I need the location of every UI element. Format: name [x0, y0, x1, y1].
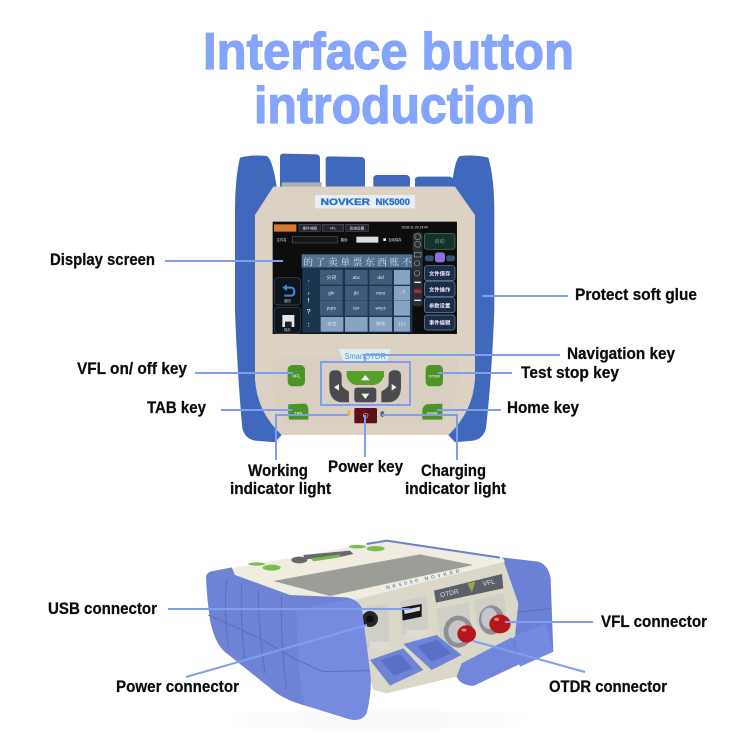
device: front view: 保存: [284, 327, 291, 332]
label: display screen: Display screen: [50, 250, 155, 269]
device: front view: NK5000: [376, 197, 410, 207]
device: front view: ,: [308, 288, 310, 295]
label: charging indicator light: Charging: [421, 461, 486, 480]
label: VFL connector: VFL connector: [601, 612, 707, 631]
device: front view: 分词: [327, 274, 336, 281]
TAB key: [288, 404, 308, 420]
device: front view: ?: [307, 308, 311, 315]
VFL key: [288, 365, 305, 386]
right menu buttons: [424, 233, 455, 249]
device: front view: 自动保存: [388, 237, 402, 242]
logo plate: [315, 195, 415, 208]
device: front view: 2018-11-29 14:44: [402, 225, 428, 229]
label: working indicator light: [230, 461, 331, 498]
device: front view: def: [377, 275, 385, 280]
device: front view: 符号: [376, 321, 386, 328]
HOME key: [422, 404, 442, 420]
title: [203, 23, 574, 135]
charging light: [380, 411, 384, 417]
top casing: [232, 541, 505, 599]
device: front view: 返回: [284, 298, 291, 303]
device: front view: ghi: [328, 291, 334, 296]
power key: [354, 408, 377, 423]
label: working indicator light: Working: [248, 461, 308, 480]
device: front view: abc: [353, 275, 361, 280]
left bumper: [235, 155, 282, 442]
device: front view: 事件编辑: [429, 319, 451, 327]
device: front view: 123: [398, 322, 406, 327]
navigation keys: [329, 370, 401, 402]
device: rear view: NK5000 NOVKER: [386, 568, 461, 591]
device: front view: 中文: [327, 321, 337, 328]
device: front view: :: [308, 322, 310, 329]
device: front view: pqrs: [327, 306, 337, 311]
USB port: [399, 595, 429, 635]
port label strip: VFL: [482, 579, 496, 588]
label: protect soft glue: Protect soft glue: [575, 285, 697, 304]
TAB key: TAB: [294, 410, 302, 415]
label: OTDR connector: OTDR connector: [549, 677, 667, 696]
right front bumper: [457, 637, 520, 686]
rubber port covers: [370, 630, 427, 650]
port label strip: OTDR: [440, 588, 460, 599]
right bumper: [502, 557, 553, 667]
VFL connector port: [474, 593, 511, 635]
port label strip: [434, 574, 503, 603]
label: TAB key: TAB key: [147, 398, 206, 417]
screen: [273, 222, 457, 334]
device: front view: 的了卖单票东西账不: [303, 254, 412, 268]
label: charging indicator light: [405, 461, 506, 498]
device: front view: 文件名: [277, 237, 287, 242]
nav key outline: [321, 362, 410, 405]
device: front view: 文件操作: [429, 285, 451, 293]
device: front view: [235, 154, 494, 442]
top keys: [248, 545, 385, 571]
label: home key: Home key: [507, 398, 579, 417]
device: front view: !: [308, 297, 310, 304]
rear panel: [350, 560, 518, 693]
leader lines: [165, 261, 593, 677]
title: introduction: [254, 77, 535, 135]
device: front view: mno: [376, 291, 386, 296]
device: front view: SmartOTDR: [344, 352, 386, 361]
VFL key: VFL: [292, 374, 301, 379]
label: power key: Power key: [328, 457, 403, 476]
device: front view: 参数设置: [429, 301, 451, 309]
OTDR key: OTDR: [429, 374, 440, 379]
OTDR connector port: [436, 601, 476, 648]
device: front view: wxyz: [375, 306, 386, 311]
device: front view: 路径:: [341, 237, 348, 242]
label: working indicator light: indicator light: [230, 479, 331, 498]
power port: [362, 603, 389, 648]
label: test stop key: Test stop key: [521, 363, 619, 382]
device: rear view: [206, 541, 553, 727]
device: front view: jkl: [353, 291, 359, 296]
right tool column: [413, 232, 423, 306]
candidate bar: [302, 254, 412, 268]
device: front view: .,?!: [399, 290, 405, 295]
device: front view: NOVKER: [321, 197, 370, 207]
device: front view: tuv: [353, 306, 360, 311]
device: front view: 文件保存: [429, 269, 451, 277]
device: front view: 事件地图: [302, 225, 317, 230]
back and save buttons: [274, 278, 300, 305]
device: front view: 启动: [435, 238, 445, 245]
top connectors: [280, 154, 453, 187]
left bumper: [206, 567, 371, 720]
label: VFL key: VFL on/ off key: [77, 359, 187, 378]
HOME key: HOME: [427, 411, 438, 415]
OTDR key: [426, 365, 443, 386]
device: front view: VFL: [330, 226, 336, 230]
device: front view: .: [308, 277, 310, 284]
label: power connector: Power connector: [116, 677, 239, 696]
working light: [347, 410, 351, 417]
right bumper: [448, 155, 494, 442]
keypad recess: [272, 358, 458, 425]
keyboard: [302, 268, 412, 333]
body: [255, 187, 475, 435]
label: charging indicator light: indicator light: [405, 479, 506, 498]
label: navigation key: Navigation key: [567, 344, 675, 363]
title: Interface button: [203, 23, 574, 81]
SmartOTDR plate: [339, 349, 391, 362]
device: front view: 系统设置: [350, 225, 365, 230]
label: USB connector: USB connector: [48, 599, 157, 618]
screen surface: [273, 554, 473, 596]
